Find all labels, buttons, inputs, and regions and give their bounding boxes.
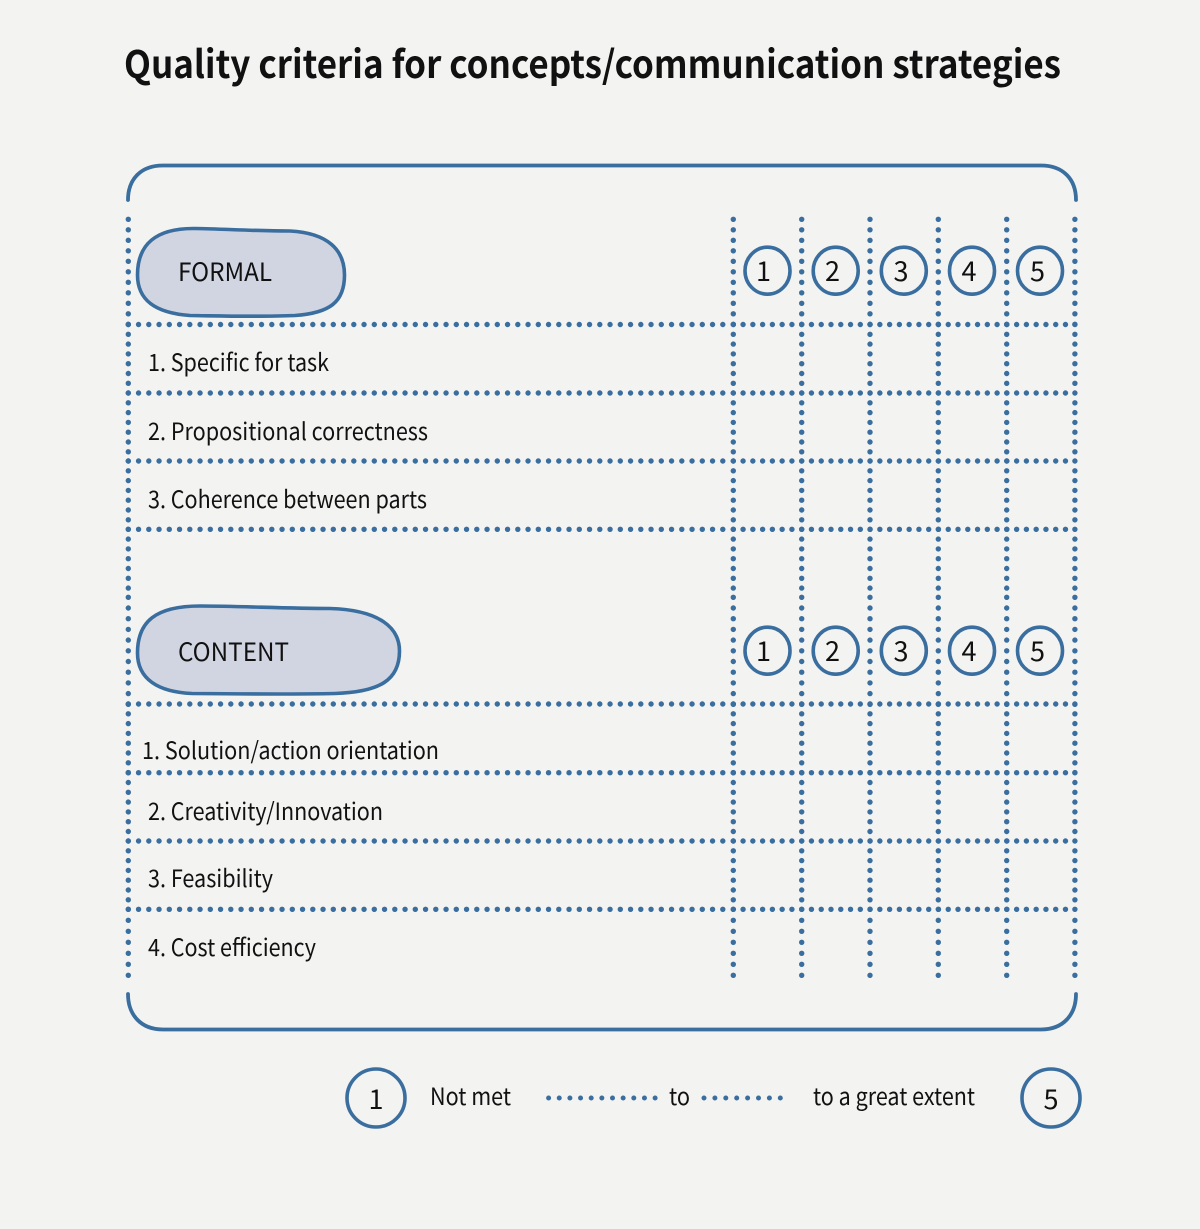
rating scale header: formal: 1: [756, 250, 771, 289]
criteria: formal: 2. Propositional correctness: [148, 412, 428, 447]
rating scale header: formal: 4: [962, 250, 976, 289]
legend: dotted scale left: [549, 1096, 656, 1100]
criteria: content: [142, 731, 439, 963]
heading: formal: [138, 228, 344, 316]
rating scale header: content: 5: [1030, 630, 1045, 669]
title: Quality criteria for concepts/communication strategies: [124, 34, 1061, 89]
rating scale header: formal: [745, 247, 1062, 294]
heading: content: [138, 606, 400, 694]
rating scale header: content: [745, 627, 1062, 674]
legend: circle 1: [347, 1069, 405, 1127]
criteria: content: 4. Cost efficiency: [148, 928, 316, 963]
criteria: content: 1. Solution/action orientation: [142, 731, 439, 766]
legend: to: to: [669, 1077, 690, 1112]
legend: dotted scale right: [704, 1096, 781, 1100]
panel: formal section: [138, 228, 1062, 515]
criteria: formal: 3. Coherence between parts: [148, 480, 427, 515]
criteria: formal: [148, 343, 428, 515]
panel: content section: [138, 606, 1062, 963]
table frame: [128, 166, 1076, 1030]
legend: circle 5: [1022, 1069, 1080, 1127]
heading: content: CONTENT: [178, 633, 289, 669]
criteria: content: 2. Creativity/Innovation: [148, 792, 383, 827]
heading: formal: FORMAL: [178, 253, 272, 289]
rating scale header: content: 4: [962, 630, 976, 669]
legend: not met: Not met: [430, 1077, 511, 1112]
dotted grid: [128, 219, 1075, 976]
rating scale header: formal: 3: [894, 250, 908, 289]
legend: [347, 1069, 1080, 1127]
rating scale header: formal: 5: [1030, 250, 1045, 289]
rating scale header: content: 3: [894, 630, 908, 669]
legend: circle 1: 1: [368, 1078, 384, 1117]
legend: circle 5: 5: [1044, 1078, 1058, 1117]
legend: to a great extent: to a great extent: [813, 1077, 975, 1112]
criteria: formal: 1. Specific for task: [148, 343, 329, 378]
criteria: content: 3. Feasibility: [148, 859, 273, 894]
rating scale header: formal: 2: [825, 250, 840, 289]
rating scale header: content: 1: [756, 630, 771, 669]
rating scale header: content: 2: [825, 630, 840, 669]
